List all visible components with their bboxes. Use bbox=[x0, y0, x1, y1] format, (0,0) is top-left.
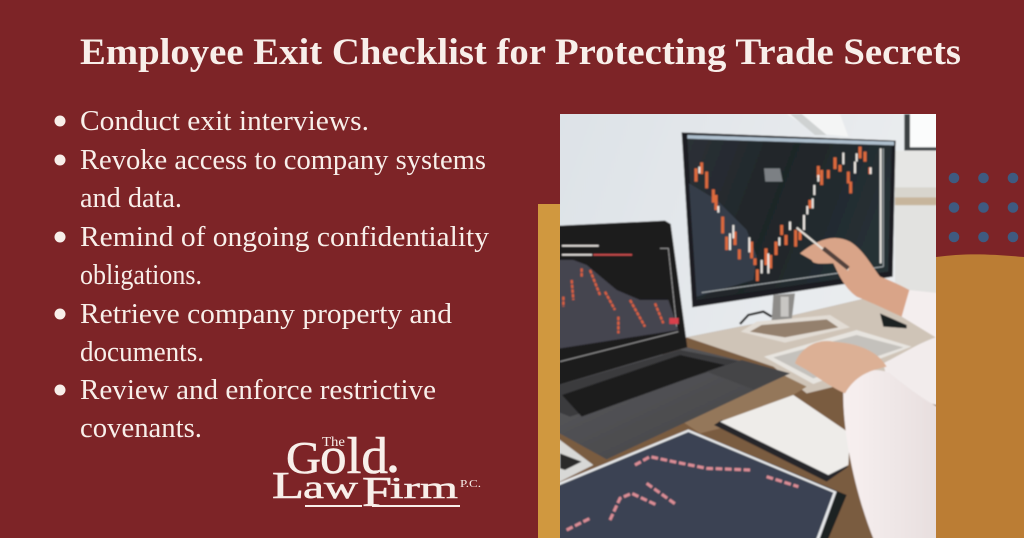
logo: The Gold Law Firm P.C.: P.C. bbox=[460, 479, 481, 490]
title: Employee Exit Checklist for Protecting Trade Secrets bbox=[80, 31, 961, 72]
orange wave block bbox=[936, 254, 1024, 538]
laptop bbox=[553, 221, 790, 459]
wall bbox=[560, 114, 936, 384]
logo: The Gold Law Firm P.C.: irm bbox=[390, 470, 458, 505]
candlestick chart bbox=[696, 147, 881, 281]
shirt sleeves bbox=[843, 290, 943, 538]
bullet item 2: and data. bbox=[80, 183, 182, 214]
ceiling and window bbox=[788, 114, 936, 292]
bullet item 4: Retrieve company property and bbox=[80, 299, 452, 330]
keyboard bbox=[764, 330, 912, 384]
logo: The Gold Law Firm P.C.: G bbox=[286, 432, 321, 483]
bullet item 2: Revoke access to company systems bbox=[80, 145, 486, 176]
hand on keyboard bbox=[795, 341, 887, 393]
pointing hand with pen bbox=[797, 228, 909, 317]
bullet item 4 bbox=[54, 299, 452, 368]
bullet item 3: Remind of ongoing confidentiality bbox=[80, 222, 490, 253]
logo: The Gold Law Firm P.C.: old bbox=[320, 428, 388, 485]
checklist bbox=[54, 106, 490, 444]
dot grid bbox=[949, 173, 1018, 242]
bullet item 5 bbox=[54, 375, 436, 444]
logo: The Gold Law Firm P.C.: aw bbox=[303, 470, 358, 506]
bullet item 5: Review and enforce restrictive bbox=[80, 375, 436, 406]
logo: The Gold Law Firm P.C.: F bbox=[362, 470, 392, 516]
logo: The Gold Law Firm P.C.: The bbox=[322, 435, 345, 450]
bullet item 3 bbox=[54, 222, 490, 291]
desk bbox=[560, 336, 936, 538]
bullet item 3: obligations. bbox=[80, 260, 202, 291]
bullet item 5: covenants. bbox=[80, 413, 202, 444]
printed chart sheet bbox=[553, 429, 847, 538]
bullet item 4: documents. bbox=[80, 337, 204, 368]
calculator bbox=[560, 438, 594, 482]
photo: trader at desk with charts bbox=[553, 107, 943, 538]
logo: The Gold Law Firm P.C. bbox=[272, 428, 481, 516]
logo: The Gold Law Firm P.C.: L bbox=[272, 465, 304, 507]
monitor bbox=[682, 132, 896, 343]
gold accent block bbox=[538, 204, 561, 538]
bullet item 2 bbox=[54, 145, 486, 214]
bullet item 1: Conduct exit interviews. bbox=[80, 106, 369, 137]
notebook bbox=[714, 395, 850, 482]
